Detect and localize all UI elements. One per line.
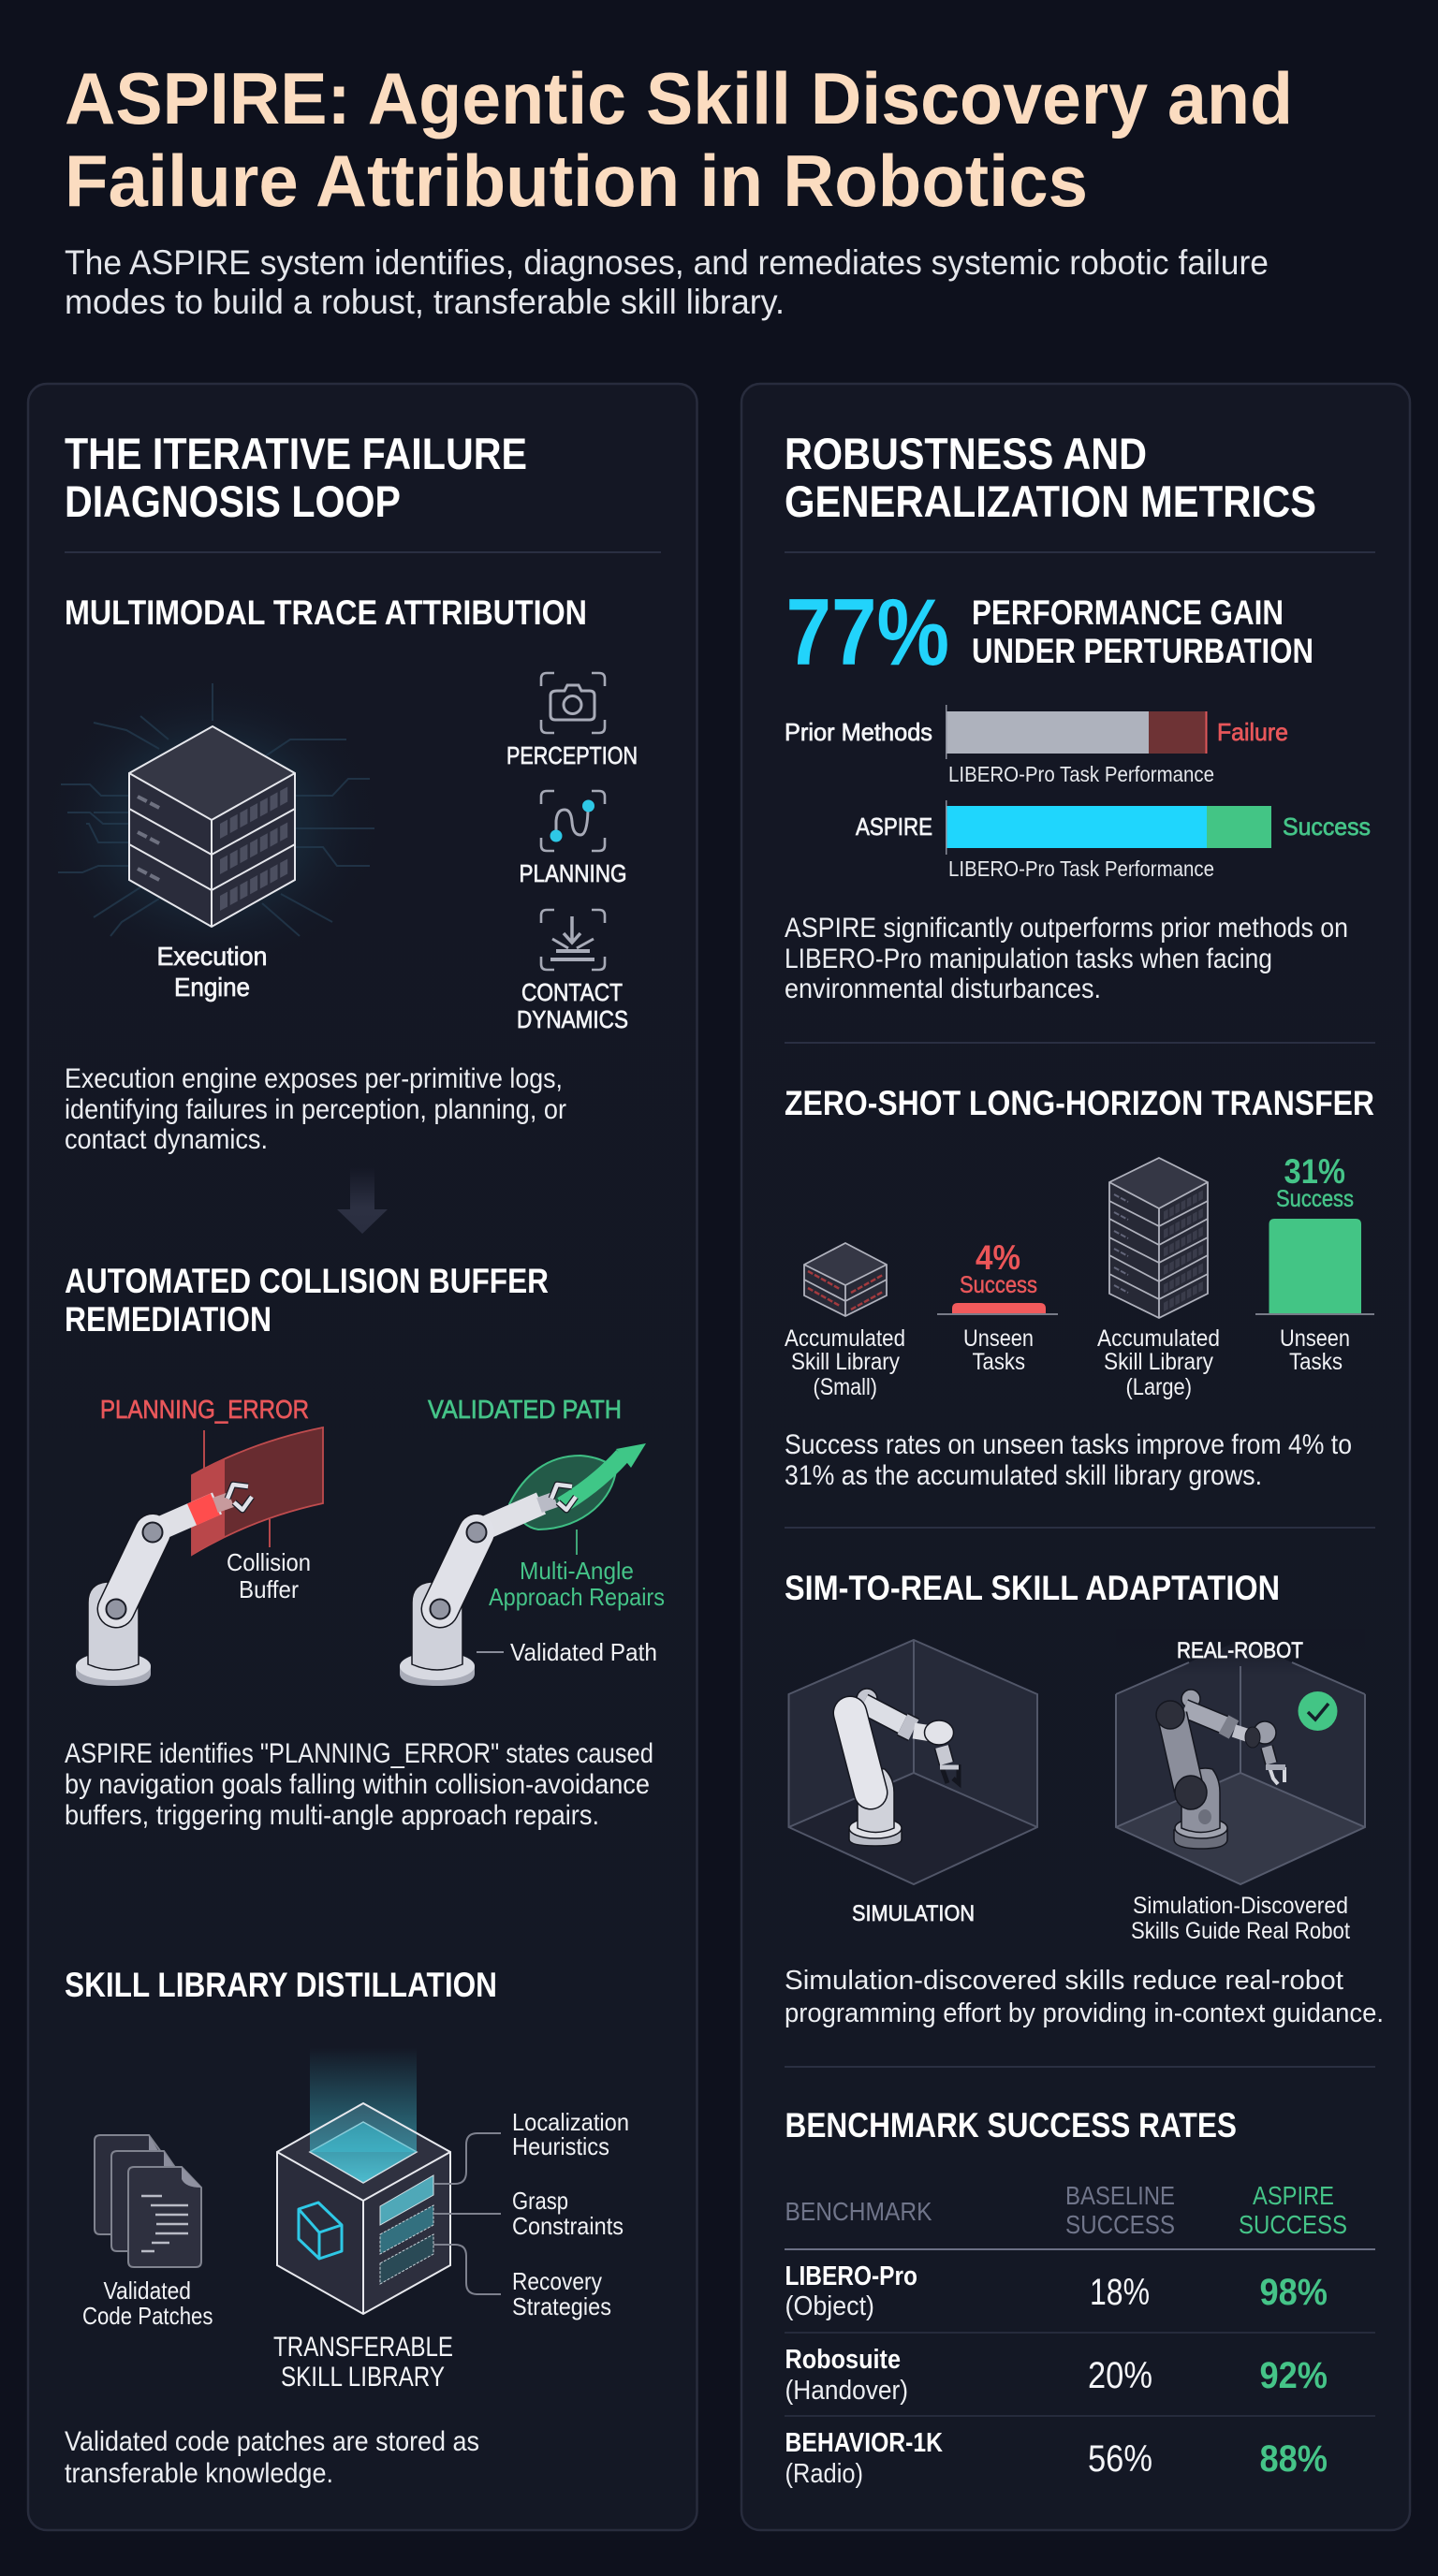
label: transferable skill library: SKILL LIBRARY xyxy=(281,2362,445,2393)
label: validated code patches: Code Patches xyxy=(82,2302,213,2330)
table row: robosuite: 92% xyxy=(1260,2355,1328,2396)
bar: 4 percent success xyxy=(937,1238,1058,1315)
heading: skill library distillation: SKILL LIBRARY DISTILLATION xyxy=(65,1966,497,2004)
table row: behavior-1k: BEHAVIOR-1K xyxy=(785,2428,943,2458)
label: grasp constraints: Constraints xyxy=(512,2212,624,2240)
text block: skill library description: transferable knowledge. xyxy=(65,2458,333,2489)
subtitle: The ASPIRE system identifies, diagnoses, and remediates systemic robotic failure xyxy=(65,243,1269,282)
label: multi-angle approach repairs: Approach Repairs xyxy=(489,1583,665,1611)
label: transferable skill library: TRANSFERABLE xyxy=(273,2332,453,2363)
label: small library caption xyxy=(785,1325,905,1400)
label: transferable skill library xyxy=(273,2332,453,2393)
label: collision buffer: Collision xyxy=(227,1548,311,1576)
label: collision buffer xyxy=(227,1548,311,1603)
label: small library caption: (Small) xyxy=(813,1374,877,1400)
text block: skill library description xyxy=(65,2426,479,2489)
icon: planning path xyxy=(541,791,605,851)
label: execution engine: Execution xyxy=(157,942,268,971)
illustration: real robot in box xyxy=(1116,1629,1365,1884)
panel heading: left xyxy=(65,429,661,553)
bar: 4 percent success: 4% xyxy=(976,1238,1020,1277)
label: large library caption xyxy=(1097,1325,1220,1400)
arrow: down flow xyxy=(337,1167,388,1234)
label: execution engine: Engine xyxy=(174,973,250,1002)
title: ASPIRE: Agentic Skill Discovery and xyxy=(65,57,1293,139)
text block: performance description: ASPIRE significantly outperforms prior methods on xyxy=(785,913,1348,944)
text block: collision buffer description: by navigation goals falling within collision-avoidance xyxy=(65,1769,650,1800)
text block: performance description: LIBERO-Pro manipulation tasks when facing xyxy=(785,944,1272,974)
label: grasp constraints xyxy=(512,2187,624,2240)
label: simulation-discovered skills: Simulation-Discovered xyxy=(1133,1893,1348,1919)
table row: robosuite: 20% xyxy=(1088,2355,1152,2396)
table row: libero-pro: (Object) xyxy=(785,2291,874,2321)
subtitle: modes to build a robust, transferable skill library. xyxy=(65,283,785,321)
label: recovery strategies: Strategies xyxy=(512,2292,611,2320)
label: small library caption: Skill Library xyxy=(791,1349,900,1375)
icon: contact dynamics xyxy=(541,910,605,970)
icon: large skill library stack xyxy=(1109,1158,1208,1318)
table row: libero-pro: 18% xyxy=(1090,2272,1150,2313)
table header: BASELINE xyxy=(1065,2181,1175,2210)
label: planning: PLANNING xyxy=(519,859,627,887)
panel heading: right: ROBUSTNESS AND xyxy=(785,429,1147,478)
text block: collision buffer description: ASPIRE identifies "PLANNING_ERROR" states caused xyxy=(65,1738,653,1769)
text block: sim-to-real description: Simulation-discovered skills reduce real-robot xyxy=(785,1966,1343,1996)
bar chart: aspire xyxy=(856,800,1371,881)
bar chart: aspire: ASPIRE xyxy=(856,812,932,841)
label: multi-angle approach repairs: Multi-Angle xyxy=(520,1557,634,1585)
label: multi-angle approach repairs xyxy=(489,1557,665,1611)
text block: sim-to-real description: programming effort by providing in-context guidance. xyxy=(785,1998,1384,2028)
label: validated code patches xyxy=(82,2276,213,2330)
label: unseen tasks small xyxy=(963,1325,1034,1375)
label: collision buffer: Buffer xyxy=(239,1575,299,1603)
label: execution engine xyxy=(157,942,268,1002)
label: localization heuristics: Localization xyxy=(512,2108,629,2136)
text block: transfer description: Success rates on unseen tasks improve from 4% to xyxy=(785,1429,1352,1460)
label: validated path: Validated Path xyxy=(510,1638,657,1666)
label: simulation-discovered skills xyxy=(1131,1893,1350,1944)
table header: SUCCESS xyxy=(1239,2210,1347,2239)
text block: execution engine description: Execution engine exposes per-primitive logs, xyxy=(65,1063,563,1094)
icon: transferable skill library cube xyxy=(277,2047,450,2314)
table row: libero-pro xyxy=(785,2261,1328,2321)
icon: validated code patches documents xyxy=(95,2135,201,2267)
illustration: robot arm hitting collision buffer xyxy=(76,1427,323,1686)
connector lines: skill library items xyxy=(433,2133,501,2294)
label: localization heuristics: Heuristics xyxy=(512,2132,609,2160)
label: validated code patches: Validated xyxy=(103,2276,191,2305)
label: simulation: SIMULATION xyxy=(852,1901,975,1926)
label: validated path heading: VALIDATED PATH xyxy=(428,1395,622,1424)
icon: green check xyxy=(1298,1691,1337,1731)
title xyxy=(65,57,1293,222)
label: real-robot: REAL-ROBOT xyxy=(1177,1638,1303,1663)
table row: behavior-1k: (Radio) xyxy=(785,2459,863,2489)
stat label: performance gain: UNDER PERTURBATION xyxy=(972,632,1313,670)
text block: execution engine description: contact dynamics. xyxy=(65,1124,268,1155)
text block: performance description xyxy=(785,913,1348,1004)
text block: performance description: environmental disturbances. xyxy=(785,973,1101,1004)
label: contact dynamics: CONTACT xyxy=(521,978,623,1006)
label: unseen tasks large xyxy=(1280,1325,1350,1375)
panel heading: left: DIAGNOSIS LOOP xyxy=(65,476,401,526)
label: planning error: PLANNING_ERROR xyxy=(100,1395,309,1424)
table row: robosuite: Robosuite xyxy=(785,2345,901,2375)
bar chart: prior methods xyxy=(785,705,1288,786)
table header: ASPIRE xyxy=(1253,2181,1334,2210)
label: recovery strategies: Recovery xyxy=(512,2267,602,2295)
label: recovery strategies xyxy=(512,2267,611,2320)
text block: transfer description xyxy=(785,1429,1352,1491)
text block: execution engine description: identifying failures in perception, planning, or xyxy=(65,1094,566,1125)
text block: skill library description: Validated code patches are stored as xyxy=(65,2426,479,2457)
label: small library caption: Accumulated xyxy=(785,1325,905,1352)
label: unseen tasks small: Unseen xyxy=(963,1325,1034,1352)
icon: small skill library stack xyxy=(804,1243,887,1316)
table header: SUCCESS xyxy=(1065,2210,1175,2239)
icon: execution engine server stack xyxy=(43,679,380,969)
text block: transfer description: 31% as the accumulated skill library grows. xyxy=(785,1460,1262,1491)
panel: iterative failure diagnosis loop xyxy=(28,384,697,2530)
label: contact dynamics xyxy=(517,978,628,1033)
heading: multimodal trace attribution: MULTIMODAL TRACE ATTRIBUTION xyxy=(65,593,587,632)
stat label: performance gain xyxy=(972,593,1313,670)
label: perception: PERCEPTION xyxy=(506,741,638,769)
table row: libero-pro: 98% xyxy=(1260,2272,1328,2313)
heading: benchmark success rates: BENCHMARK SUCCESS RATES xyxy=(785,2106,1237,2144)
table row: behavior-1k xyxy=(785,2428,1328,2489)
illustration: robot arm with validated path xyxy=(400,1443,646,1686)
stat label: performance gain: PERFORMANCE GAIN xyxy=(972,593,1284,632)
label: large library caption: Skill Library xyxy=(1104,1349,1213,1375)
bar chart: prior methods: LIBERO-Pro Task Performance xyxy=(948,762,1214,786)
panel: robustness and generalization metrics xyxy=(741,384,1410,2530)
table: benchmark success rates xyxy=(785,2181,1375,2489)
label: grasp constraints: Grasp xyxy=(512,2187,568,2215)
heading: automated collision buffer remediation: REMEDIATION xyxy=(65,1300,271,1339)
bar chart: aspire: LIBERO-Pro Task Performance xyxy=(948,856,1214,881)
label: unseen tasks large: Unseen xyxy=(1280,1325,1350,1352)
bar: 31 percent success: 31% xyxy=(1284,1152,1345,1191)
label: unseen tasks large: Tasks xyxy=(1289,1349,1343,1375)
label: unseen tasks small: Tasks xyxy=(972,1349,1025,1375)
bar chart: prior methods: Prior Methods xyxy=(785,718,932,746)
label: large library caption: Accumulated xyxy=(1097,1325,1220,1352)
table row: behavior-1k: 56% xyxy=(1088,2438,1152,2480)
bar: 31 percent success: Success xyxy=(1276,1186,1354,1212)
panel heading: right xyxy=(785,429,1375,553)
text block: execution engine description xyxy=(65,1063,566,1155)
bar: 31 percent success xyxy=(1255,1152,1374,1315)
stat: 77 percent: 77% xyxy=(786,580,949,685)
label: simulation-discovered skills: Skills Guide Real Robot xyxy=(1131,1918,1350,1944)
bar chart: prior methods: Failure xyxy=(1217,718,1288,746)
label: large library caption: (Large) xyxy=(1125,1374,1192,1400)
panel heading: right: GENERALIZATION METRICS xyxy=(785,476,1316,526)
panel heading: left: THE ITERATIVE FAILURE xyxy=(65,429,527,478)
bar: 4 percent success: Success xyxy=(960,1272,1037,1298)
table row: robosuite xyxy=(785,2345,1328,2406)
illustration: simulation robot in box xyxy=(788,1640,1037,1884)
label: contact dynamics: DYNAMICS xyxy=(517,1005,628,1033)
table row: behavior-1k: 88% xyxy=(1260,2438,1328,2480)
text block: collision buffer description xyxy=(65,1738,653,1831)
heading: sim-to-real skill adaptation: SIM-TO-REAL SKILL ADAPTATION xyxy=(785,1569,1280,1607)
bar chart: aspire: Success xyxy=(1283,812,1371,841)
subtitle xyxy=(65,243,1269,321)
table header: BENCHMARK xyxy=(785,2197,932,2226)
label: localization heuristics xyxy=(512,2108,629,2160)
title: Failure Attribution in Robotics xyxy=(65,139,1088,222)
text block: sim-to-real description xyxy=(785,1966,1384,2028)
heading: automated collision buffer remediation: AUTOMATED COLLISION BUFFER xyxy=(65,1262,549,1300)
icon: perception camera xyxy=(541,673,605,733)
table row: robosuite: (Handover) xyxy=(785,2376,908,2406)
table row: libero-pro: LIBERO-Pro xyxy=(785,2261,917,2291)
heading: automated collision buffer remediation xyxy=(65,1262,549,1339)
table header xyxy=(785,2181,1347,2239)
text block: collision buffer description: buffers, triggering multi-angle approach repairs. xyxy=(65,1800,599,1831)
